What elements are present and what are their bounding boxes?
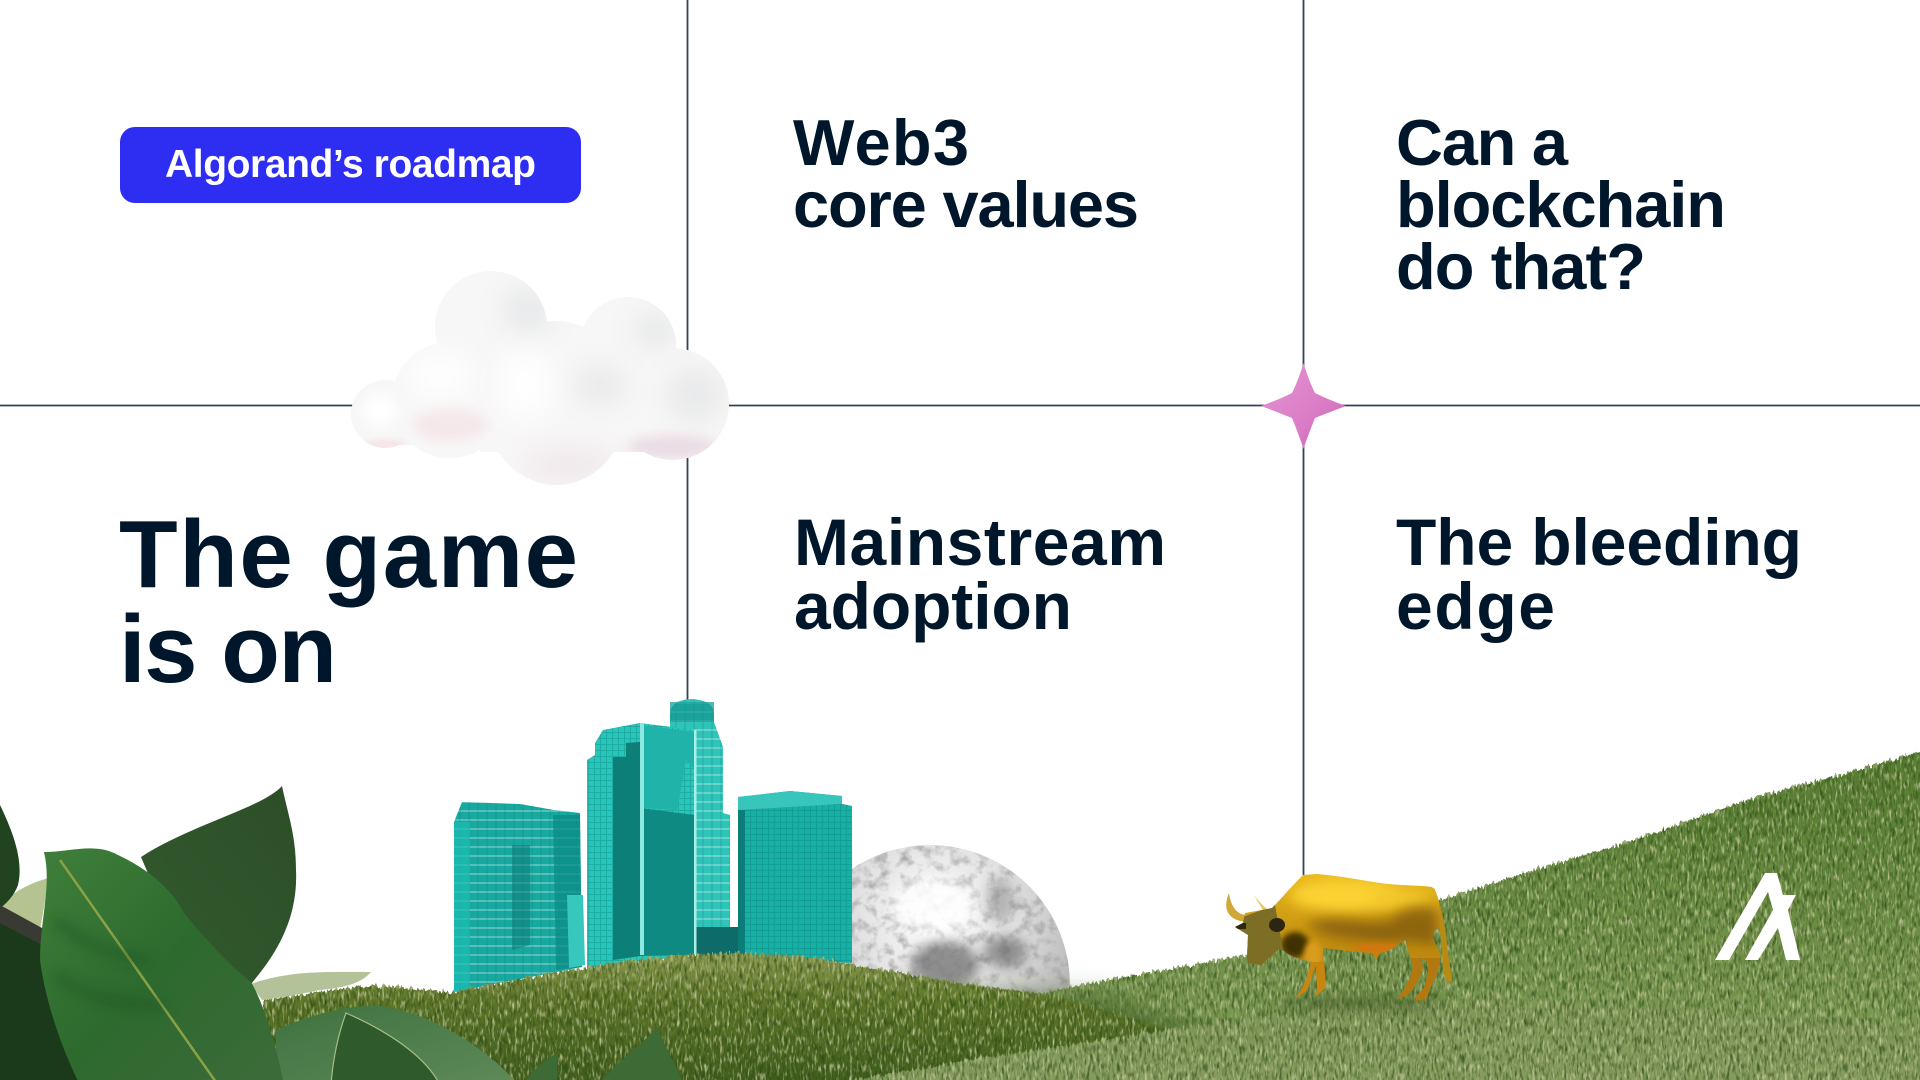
- icon: Algorand logo: [1715, 873, 1800, 960]
- grass: right slope: [1000, 750, 1920, 1080]
- moon: [826, 845, 1070, 995]
- left tower: [454, 802, 582, 992]
- topic: Mainstream adoption: Mainstream: [794, 505, 1166, 579]
- topic: Web3 core values: Web3: [793, 106, 969, 179]
- badge: Algorand's roadmap: [120, 127, 581, 203]
- rear skyscraper: [670, 699, 738, 957]
- heading: The game is on: is on: [119, 596, 337, 703]
- topic: Can a blockchain do that?: Can a: [1396, 106, 1569, 179]
- icon: golden bull: [1226, 874, 1452, 1010]
- topic: The bleeding edge: [1396, 505, 1802, 643]
- buildings: [454, 699, 852, 992]
- round leaf: [276, 1006, 518, 1080]
- lower left dark leaf: [0, 923, 82, 1080]
- topic: Can a blockchain do that?: do that?: [1396, 230, 1646, 303]
- grass: left hill: [250, 953, 1200, 1080]
- back leaf: [141, 786, 296, 984]
- topic: Mainstream adoption: [794, 505, 1166, 643]
- icon: cloud: [352, 272, 729, 485]
- main leaf: [40, 848, 284, 1080]
- icon: pink sparkle star: [1261, 363, 1346, 449]
- grass: foreground swath: [820, 1000, 1920, 1080]
- topic: Mainstream adoption: adoption: [794, 569, 1072, 643]
- grass: dark valley shadow: [950, 1000, 1230, 1080]
- dark stem: [0, 905, 42, 950]
- topic: Web3 core values: [793, 106, 1139, 241]
- far left leaf: [0, 805, 20, 908]
- topic: Can a blockchain do that?: blockchain: [1396, 168, 1726, 241]
- topic: The bleeding edge: The bleeding: [1396, 505, 1802, 579]
- plant leaves: [0, 786, 683, 1080]
- centre tower: [567, 723, 696, 968]
- heading: The game is on: [119, 501, 578, 703]
- pale right leaf: [251, 972, 371, 1000]
- topic: Can a blockchain do that?: [1396, 106, 1726, 303]
- topic: The bleeding edge: edge: [1396, 569, 1555, 643]
- right tower: [738, 791, 852, 963]
- topic: Web3 core values: core values: [793, 168, 1139, 241]
- small leaf: [331, 1013, 440, 1080]
- badge: Algorand's roadmap: Algorand’s roadmap: [165, 143, 536, 186]
- heading: The game is on: The game: [119, 501, 578, 608]
- pale background leaf: [0, 878, 49, 930]
- small leaf tips: [523, 1027, 683, 1080]
